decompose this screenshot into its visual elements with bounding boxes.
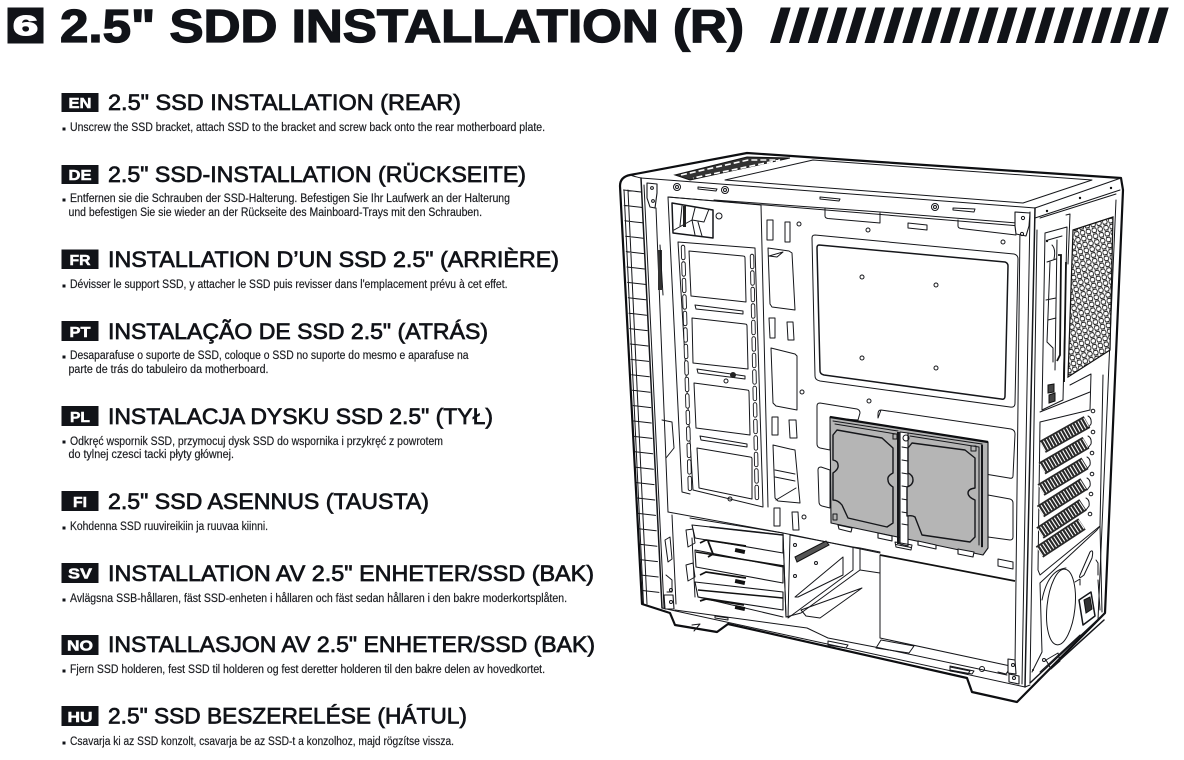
badge: PL: PL: [70, 409, 90, 426]
panel: Hungarian instructions: [62, 704, 467, 748]
middle column cutouts: [767, 220, 871, 530]
badge: EN: [62, 93, 98, 112]
badge: FI: [62, 491, 98, 511]
heading: HU: 2.5" SSD BESZERELÉSE (HÁTUL): [108, 704, 467, 728]
badge: PT: PT: [70, 324, 90, 341]
bracket feet: [838, 525, 974, 557]
bullet text: FR: Dévisser le support SSD, y attacher le SSD puis revisser dans l'emplacement prévu à cet effet.: [70, 279, 508, 291]
left drive: [833, 430, 893, 527]
bullet text: DE: Entfernen sie die Schrauben der SSD-Halterung. Befestigen Sie Ihr Laufwerk an der Halterung: [70, 193, 510, 205]
bullet text: DE: und befestigen Sie sie wieder an der Rückseite des Mainboard-Trays mit den Schrauben.: [68, 207, 482, 219]
motherboard tray opening: [812, 235, 1018, 407]
panel: Swedish instructions: [62, 561, 594, 605]
lower compartment floor lines: [662, 512, 1025, 687]
heading: PT: INSTALAÇÃO DE SSD 2.5" (ATRÁS): [108, 319, 488, 344]
bullet text: PT: [62, 350, 469, 376]
badge: DE: [62, 165, 98, 184]
panel: English instructions: [62, 90, 545, 134]
bullet text: NO: Fjern SSD holderen, fest SSD til holderen og fest deretter holderen til den bakre delen av hovedkortet.: [70, 664, 545, 676]
bullet text: PL: do tylnej czesci tacki płyty głównej.: [68, 449, 234, 461]
panel: German instructions: [62, 162, 526, 219]
badge: EN: EN: [68, 95, 92, 112]
PSU opening, fan and power socket: [1025, 526, 1105, 687]
heading: DE: 2.5" SSD-INSTALLATION (RÜCKSEITE): [108, 162, 526, 187]
badge: SV: SV: [68, 566, 92, 582]
heading: SV: INSTALLATION AV 2.5" ENHETER/SSD (BAK): [108, 561, 594, 586]
bullet text: PL: [62, 436, 443, 461]
badge: PT: [62, 321, 98, 341]
left SSD mounting column: [678, 242, 763, 507]
heading: EN: 2.5" SSD INSTALLATION (REAR): [108, 90, 461, 115]
badge: FR: [62, 250, 98, 269]
heading: FI: 2.5" SSD ASENNUS (TAUSTA): [108, 489, 429, 514]
bullet text: EN: Unscrew the SSD bracket, attach SSD to the bracket and screw back onto the rear motherboard plate.: [70, 122, 545, 134]
illustration: PC case rear view: [620, 153, 1123, 702]
expansion slots: [1038, 374, 1103, 575]
hard drive cages: [686, 518, 786, 617]
side panel front IO and lines: [1030, 187, 1120, 683]
panel: Finnish instructions: [62, 489, 429, 533]
top screws and slots: [647, 183, 1030, 244]
PSU cable cutout: [672, 203, 713, 238]
badge: HU: [62, 706, 98, 726]
heading: NO: INSTALLASJON AV 2.5" ENHETER/SSD (BAK): [108, 632, 595, 657]
decorative slashes: [770, 8, 1169, 43]
title: 2.5" SDD INSTALLATION (R): [60, 0, 744, 52]
bullet text: PT: Desaparafuse o suporte de SSD, coloque o SSD no suporte do mesmo e aparafuse na: [70, 350, 469, 362]
panel: Norwegian instructions: [62, 632, 595, 676]
badge: FR: FR: [70, 252, 91, 269]
badge: PL: [62, 406, 98, 426]
badge: HU: HU: [68, 709, 92, 726]
bullet text: SV: Avlägsna SSB-hållaren, fäst SSD-enheten i hållaren och fäst sedan hållaren i den bakre moderkortsplåten.: [70, 593, 567, 605]
SSD mounting bracket with two drives: [830, 417, 988, 557]
badge: DE: DE: [68, 167, 92, 184]
panel: Portuguese instructions: [62, 319, 488, 376]
case outer silhouette: [620, 153, 1123, 702]
step number badge: 6: [13, 10, 38, 41]
panel: French instructions: [62, 247, 559, 291]
badge: SV: [62, 563, 98, 583]
badge: NO: [62, 635, 98, 655]
top panel and vent: [630, 157, 1121, 208]
badge: FI: FI: [73, 494, 87, 511]
bullet text: PT: parte de trás do tabuleiro da motherboard.: [68, 364, 268, 376]
heading: FR: INSTALLATION D’UN SSD 2.5" (ARRIÈRE): [108, 247, 559, 272]
drive spine: [900, 432, 909, 546]
rear panel frame lines: [641, 178, 1035, 687]
bullet text: PL: Odkręć wspornik SSD, przymocuj dysk SSD do wspornika i przykręć z powrotem: [70, 436, 443, 448]
central storage bay: [783, 533, 880, 618]
step number badge: [8, 8, 44, 44]
side mesh vent: [1068, 217, 1113, 377]
PSU shroud: [876, 555, 1019, 684]
badge: NO: NO: [67, 638, 93, 654]
panel: Polish instructions: [62, 404, 493, 461]
lower tray cutouts: [817, 403, 1015, 569]
bullet text: HU: Csavarja ki az SSD konzolt, csavarja be az SSD-t a konzolhoz, majd rögzítse vissza.: [70, 736, 454, 748]
heading: PL: INSTALACJA DYSKU SSD 2.5" (TYŁ): [108, 404, 493, 429]
bullet text: FI: Kohdenna SSD ruuvireikiin ja ruuvaa kiinni.: [70, 521, 268, 533]
right drive: [907, 443, 975, 542]
bullet text: DE: [62, 193, 510, 219]
front panel ventilation fins: [624, 190, 659, 604]
